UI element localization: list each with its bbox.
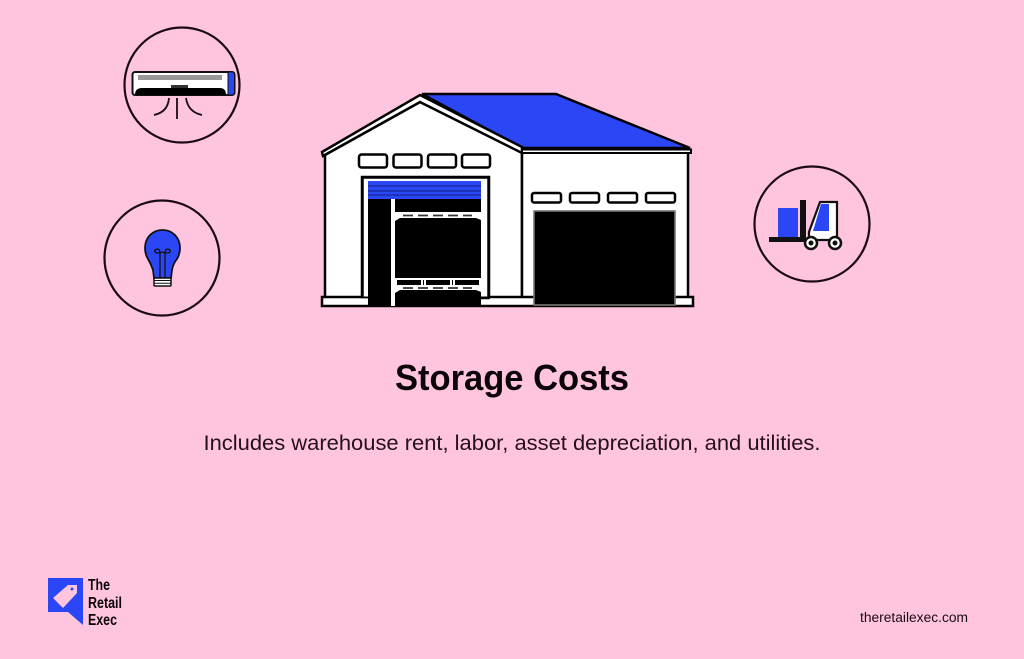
forklift wheels [805,237,841,249]
left loading door [361,177,490,306]
logo wordmark: Exec [88,612,117,629]
bulb base [154,278,171,286]
roller shutter [368,181,481,199]
logo wordmark: Retail [88,595,122,612]
website url: theretailexec.com [860,610,968,625]
logo tag [53,585,77,608]
right garage door [534,211,675,305]
air conditioner unit [132,72,234,95]
icon: forklift [754,166,870,282]
logo: The Retail Exec [48,577,122,629]
lower shelf [395,285,481,293]
description: Includes warehouse rent, labor, asset depreciation, and utilities. [204,432,820,455]
bulb glass [145,230,180,278]
forklift load [778,208,798,237]
upper windows right [532,193,675,202]
warehouse walls [325,102,688,300]
shelving post [391,199,395,306]
logo wordmark [88,577,122,629]
base plinth [322,297,693,306]
eave trim [522,150,691,153]
bulb filament [155,249,170,278]
gable trim [322,95,522,156]
logo wordmark: The [88,577,110,594]
warehouse roof [422,94,690,148]
heading: Storage Costs [395,357,629,398]
forklift cab [809,202,837,240]
pallets [395,279,481,285]
icon: air conditioner [124,28,240,142]
illustration: warehouse [322,94,693,306]
logo mark [48,578,83,625]
air flow lines [154,98,202,119]
upper windows left [359,154,490,168]
forklift mast and forks [769,200,806,242]
icon: light bulb [104,200,220,316]
upper shelf [395,212,481,221]
